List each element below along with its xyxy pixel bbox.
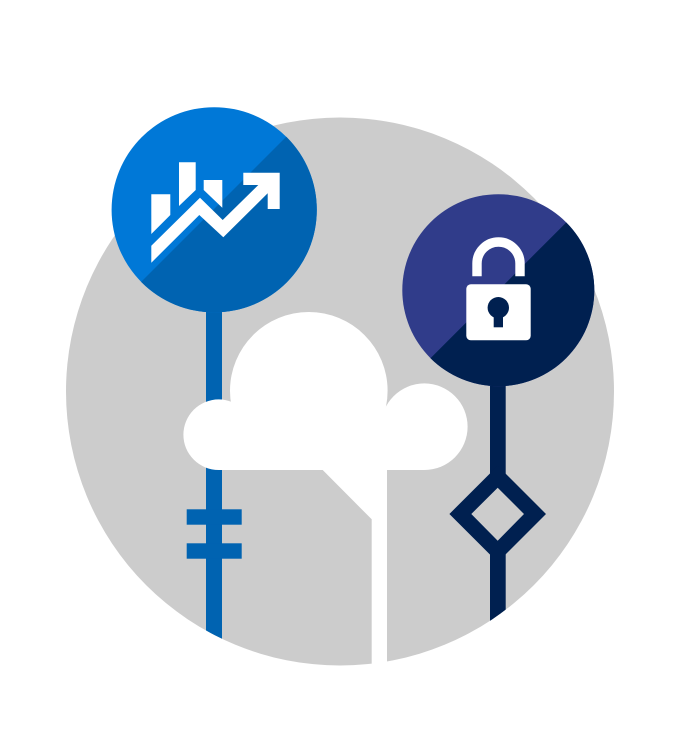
analytics badge: blue circle (112, 107, 317, 312)
badge shadow half (141, 136, 317, 312)
background gray circle (66, 118, 614, 666)
security badge: navy circle (402, 194, 594, 386)
blue pin stem with double crossbars (187, 300, 242, 645)
cloud with connector stem (183, 312, 468, 670)
badge shadow half (430, 222, 594, 386)
navy pin stem with diamond (449, 380, 546, 640)
icon: bars and rising arrow (151, 162, 280, 263)
icon: padlock (466, 242, 531, 340)
illustration: cloud with analytics and security pins (66, 107, 614, 666)
